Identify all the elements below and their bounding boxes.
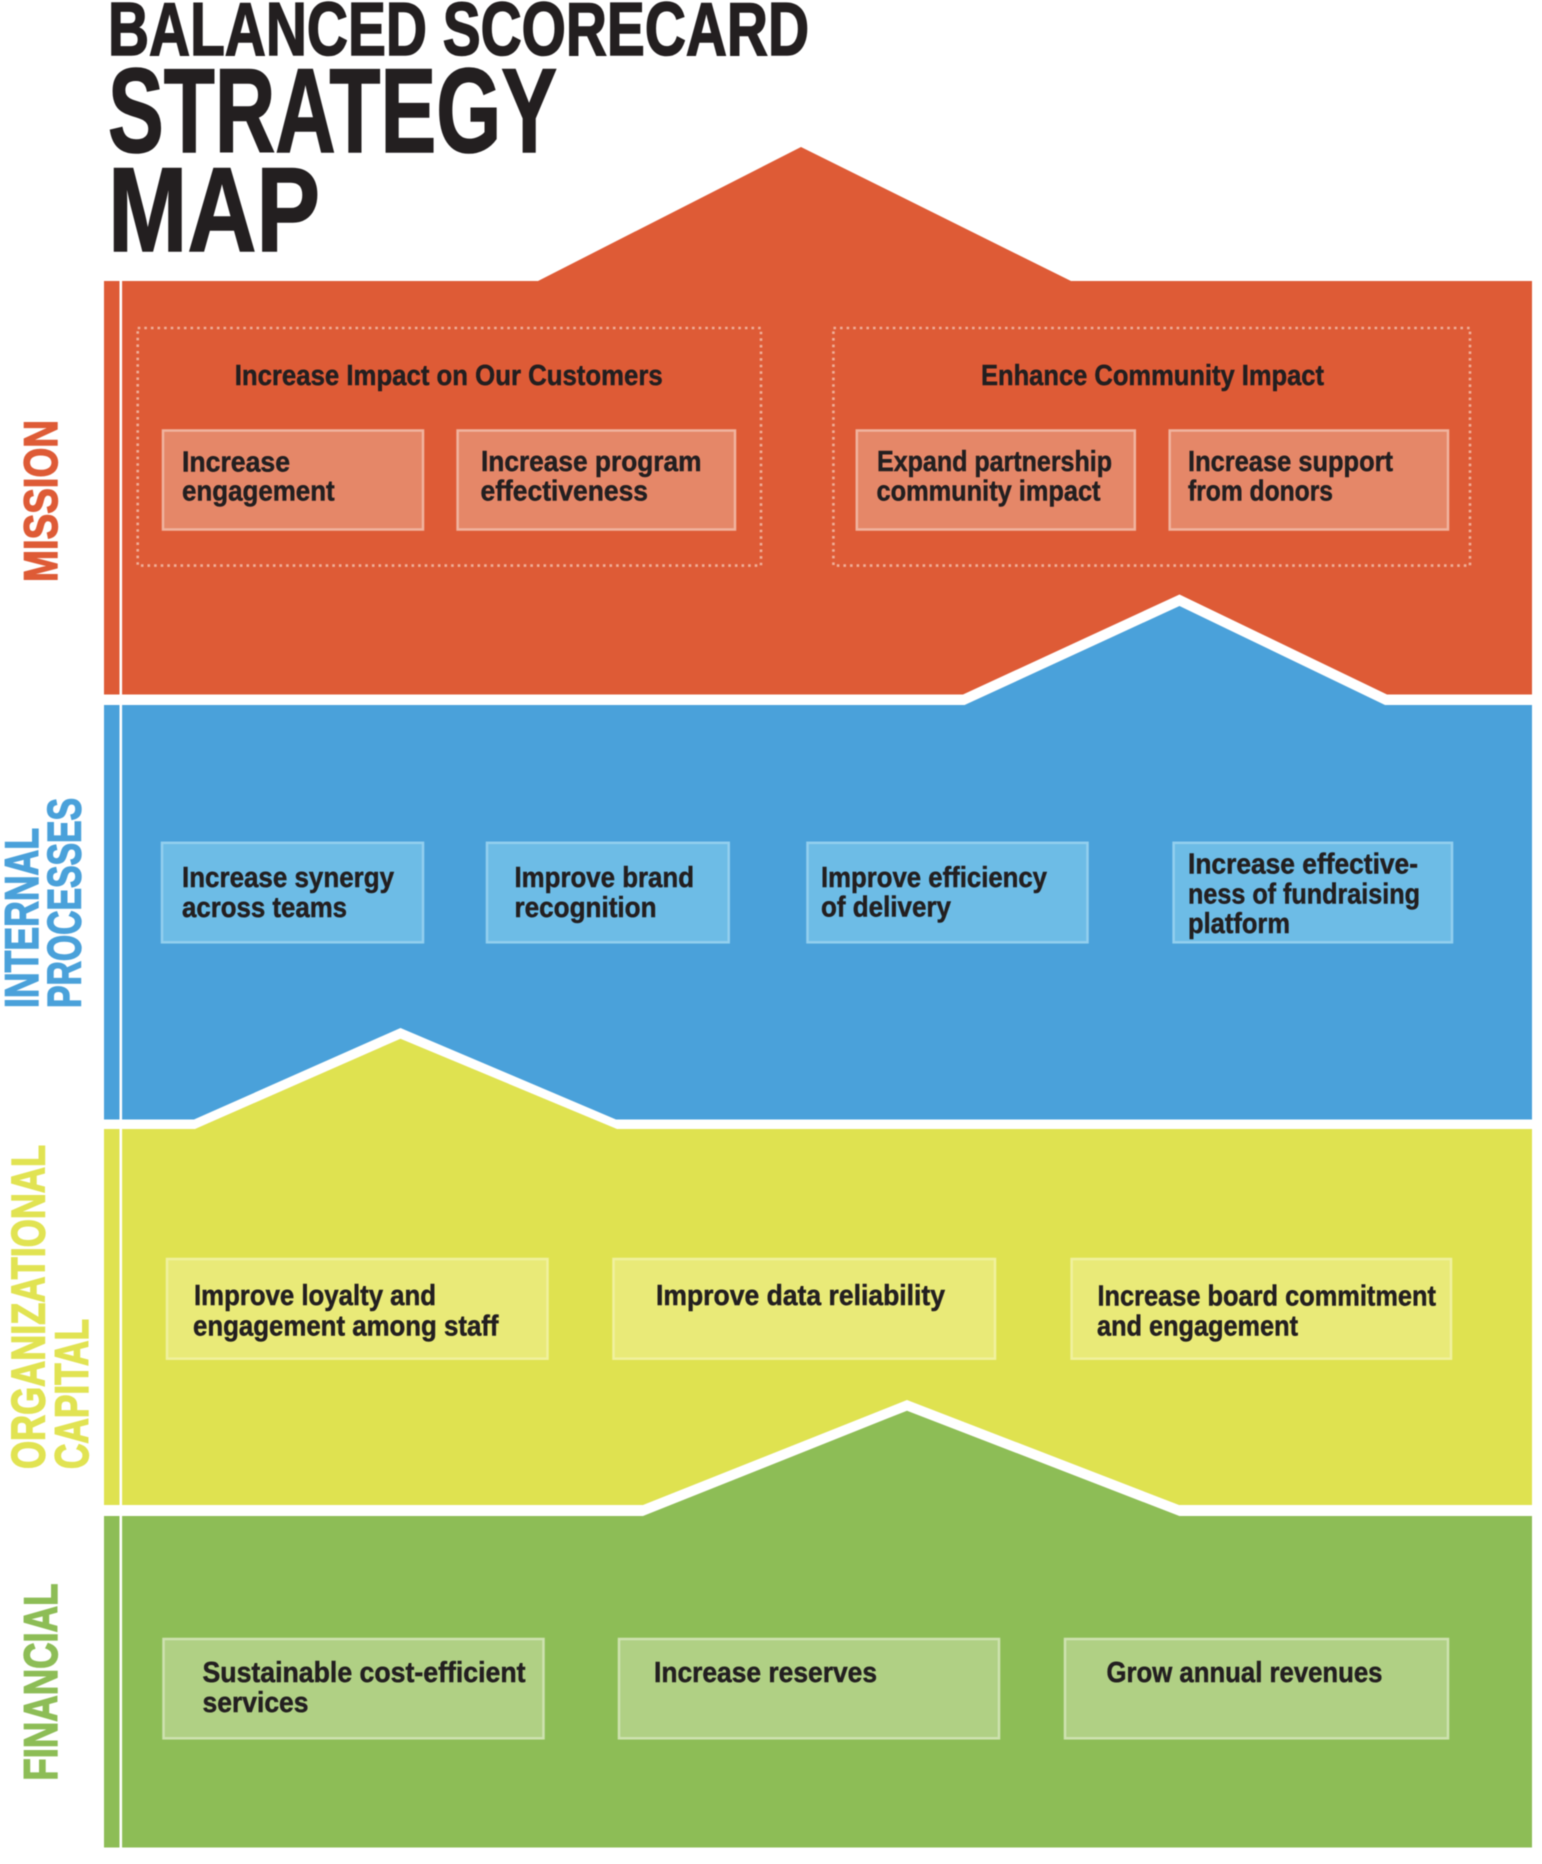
objective: increase board commitment and engagement <box>1072 1259 1451 1359</box>
organizational capital band with upward arrow <box>104 1039 1532 1505</box>
objective: increase reserves <box>619 1639 999 1738</box>
objective: expand partnership community impact: community impact <box>876 475 1101 507</box>
objective: grow annual revenues <box>1065 1639 1448 1738</box>
objective: expand partnership community impact <box>857 430 1135 530</box>
objective: increase engagement <box>163 430 423 530</box>
objective: improve data reliability: Improve data reliability <box>656 1280 945 1312</box>
objective: improve brand recognition: recognition <box>514 892 656 924</box>
objective: increase engagement: Increase <box>182 446 290 478</box>
objective: improve efficiency of delivery <box>808 843 1088 942</box>
financial band with upward arrow <box>104 1411 1532 1848</box>
panel: financial <box>104 1411 1532 1848</box>
objective: improve brand recognition <box>487 843 729 942</box>
objective: increase support from donors <box>1170 430 1448 530</box>
title <box>108 0 809 277</box>
panel: internal processes <box>104 606 1532 1120</box>
objective: increase synergy across teams: Increase synergy <box>182 862 394 894</box>
objective: improve loyalty and engagement among staff: engagement among staff <box>193 1310 499 1342</box>
objective: increase board commitment and engagement: and engagement <box>1097 1310 1298 1342</box>
objective: increase effectiveness of fundraising platform: ness of fundraising <box>1188 878 1420 910</box>
objective: sustainable cost-efficient services: Sustainable cost-efficient <box>202 1657 526 1689</box>
side label: organizational capital: ORGANIZATIONAL <box>1 1145 54 1469</box>
side label: internal processes <box>0 798 91 1008</box>
objective: increase effectiveness of fundraising platform <box>1174 843 1452 942</box>
objective: increase effectiveness of fundraising platform: platform <box>1188 908 1290 940</box>
objective: increase synergy across teams: across teams <box>182 892 347 924</box>
objective: increase support from donors: Increase support <box>1188 446 1393 478</box>
objective: expand partnership community impact: Expand partnership <box>877 446 1112 478</box>
side label: organizational capital: CAPITAL <box>45 1319 98 1469</box>
objective: increase program effectiveness <box>458 430 735 530</box>
objective: improve brand recognition: Improve brand <box>514 862 694 894</box>
panel: organizational capital <box>104 1039 1532 1505</box>
group: increase impact on our customers <box>138 328 761 566</box>
objective: grow annual revenues: Grow annual revenues <box>1106 1657 1382 1689</box>
objective: sustainable cost-efficient services <box>164 1639 544 1738</box>
side label: internal processes: PROCESSES <box>38 798 91 1008</box>
objective: improve efficiency of delivery: of delivery <box>821 892 951 924</box>
objective: improve efficiency of delivery: Improve efficiency <box>821 862 1047 894</box>
title: STRATEGY <box>108 44 557 178</box>
group: enhance community impact: Enhance Community Impact <box>981 360 1324 392</box>
title: MAP <box>108 143 320 277</box>
group: increase impact on our customers: Increase Impact on Our Customers <box>235 360 663 392</box>
objective: increase program effectiveness: Increase program <box>481 446 702 478</box>
panel: mission <box>104 147 1532 694</box>
objective: improve data reliability <box>614 1259 995 1359</box>
internal processes band with upward arrow <box>104 606 1532 1120</box>
objective: improve loyalty and engagement among staff <box>167 1259 548 1359</box>
objective: increase reserves: Increase reserves <box>654 1657 877 1689</box>
objective: increase support from donors: from donors <box>1188 475 1333 507</box>
side label: mission: MISSION <box>14 420 67 582</box>
objective: increase program effectiveness: effectiveness <box>480 476 648 508</box>
side label: organizational capital <box>1 1145 98 1469</box>
objective: sustainable cost-efficient services: services <box>202 1687 308 1719</box>
group: enhance community impact <box>833 328 1470 566</box>
objective: improve loyalty and engagement among staff: Improve loyalty and <box>194 1280 436 1312</box>
objective: increase synergy across teams <box>162 843 423 942</box>
objective: increase effectiveness of fundraising platform: Increase effective- <box>1188 848 1418 880</box>
objective: increase board commitment and engagement: Increase board commitment <box>1098 1280 1436 1312</box>
side label: financial: FINANCIAL <box>14 1584 67 1781</box>
objective: increase engagement: engagement <box>182 476 335 508</box>
mission band with upward arrow <box>104 147 1532 694</box>
